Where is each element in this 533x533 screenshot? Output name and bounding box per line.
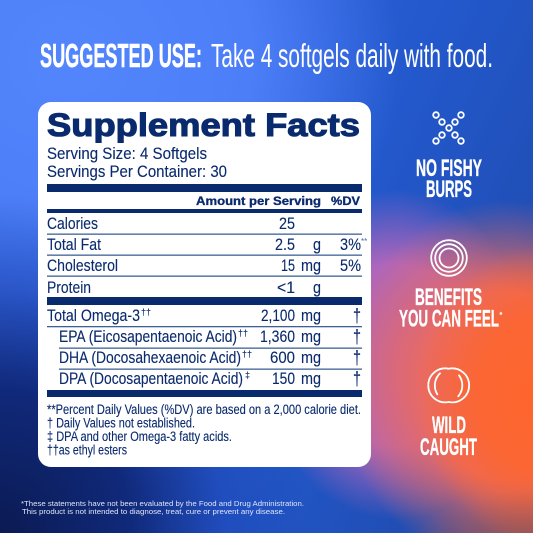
row: calories: 25 [279, 214, 295, 233]
label: wild caught: CAUGHT [420, 434, 477, 461]
thin rows dividers [47, 234, 362, 370]
panel title: Supplement Facts [47, 107, 360, 143]
row: total omega-3: mg [301, 306, 321, 325]
thick rules [47, 184, 362, 397]
row: total fat: Total Fat [47, 235, 101, 254]
row: epa [59, 327, 361, 348]
row: epa: mg [301, 327, 321, 346]
row: dpa: † [353, 369, 361, 390]
icon: overlapping circles [428, 368, 469, 402]
table header [196, 196, 360, 208]
row: calories [47, 214, 295, 233]
row: total omega-3 [47, 306, 361, 327]
footnotes: **Percent Daily Values (%DV) are based on a 2,000 calorie diet. [47, 402, 361, 417]
row: dha: 600 [270, 348, 295, 367]
table header: Amount per Serving [196, 196, 321, 208]
row: cholesterol: 15 [281, 256, 295, 275]
row: total omega-3: 2,100 [261, 306, 295, 325]
row: total fat: 2.5 [275, 235, 295, 254]
table header: %DV [331, 196, 360, 208]
row: cholesterol: Cholesterol [47, 256, 118, 275]
panel background [38, 102, 371, 467]
row: total fat [47, 235, 367, 254]
row: dha [59, 348, 361, 369]
label: benefits you can feel: * [500, 312, 502, 319]
icon: x of small rings [433, 112, 464, 144]
disclaimer: This product is not intended to diagnose, treat, cure or prevent any disease. [22, 507, 285, 516]
row: dpa: 150 [272, 369, 295, 388]
label: wild caught: WILD [432, 412, 466, 439]
row: total omega-3: †† [141, 307, 151, 317]
serving information [47, 144, 227, 181]
row: dpa: mg [301, 369, 321, 388]
row: protein: Protein [47, 278, 91, 297]
row: protein [47, 278, 321, 297]
heading: suggested use [40, 38, 493, 75]
icon: concentric circles [431, 240, 467, 276]
row: total fat: g [313, 235, 321, 254]
row: cholesterol: 5% [340, 256, 361, 275]
serving information: Servings Per Container: 30 [47, 162, 227, 181]
panel: supplement facts [38, 102, 371, 467]
serving information: Serving Size: 4 Softgels [47, 144, 207, 163]
row: dpa: ‡ [245, 370, 250, 380]
label: wild caught [420, 412, 477, 461]
disclaimer: *These statements have not been evaluated by the Food and Drug Administration. [21, 499, 304, 508]
row: dha: mg [301, 348, 321, 367]
row: calories: Calories [47, 214, 98, 233]
row: cholesterol: mg [301, 256, 321, 275]
row: total fat: 3% [340, 235, 361, 254]
footnotes: † Daily Values not established. [47, 416, 195, 430]
row: dha: † [353, 348, 361, 369]
footnotes: ††as ethyl esters [47, 442, 127, 458]
row: total omega-3: Total Omega-3 [47, 306, 140, 325]
row: epa: † [353, 327, 361, 348]
row: protein: g [313, 278, 321, 297]
row: dpa: DPA (Docosapentaenoic Acid) [59, 369, 243, 388]
label: benefits you can feel [399, 284, 502, 332]
heading: suggested use: SUGGESTED USE: [40, 38, 202, 75]
row: total fat: ** [361, 237, 367, 246]
label: no fishy burps [416, 155, 482, 203]
row: cholesterol [47, 256, 361, 275]
row: epa: 1,360 [260, 327, 295, 346]
row: epa: †† [238, 328, 248, 338]
footnotes: ‡ DPA and other Omega-3 fatty acids. [47, 429, 232, 444]
disclaimer [21, 499, 304, 516]
row: dpa [59, 369, 361, 390]
label: benefits you can feel: BENEFITS [415, 284, 482, 311]
row: total omega-3: † [353, 306, 361, 327]
row: dha: DHA (Docosahexaenoic Acid) [59, 348, 241, 367]
row: protein: <1 [277, 278, 295, 297]
label: no fishy burps: BURPS [426, 176, 472, 203]
label: no fishy burps: NO FISHY [416, 155, 482, 182]
row: dha: †† [242, 349, 252, 359]
row: epa: EPA (Eicosapentaenoic Acid) [59, 327, 237, 346]
footnotes [47, 402, 361, 458]
